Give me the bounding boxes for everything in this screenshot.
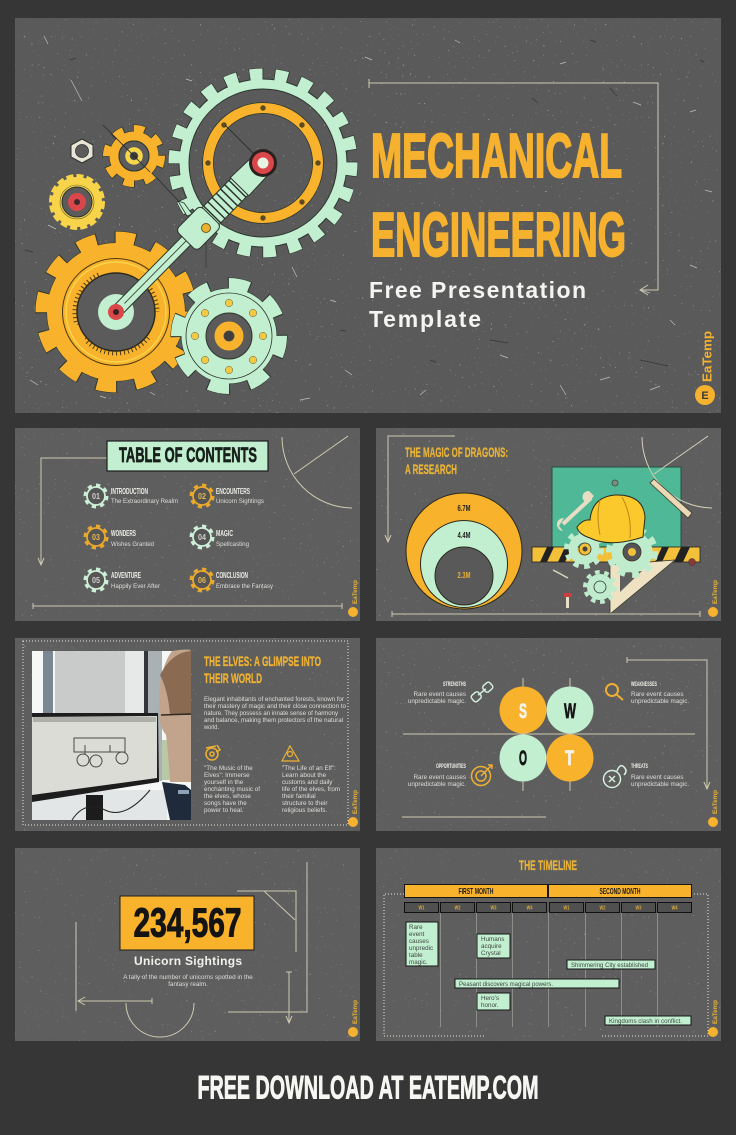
text: threats: THREATS xyxy=(631,764,648,770)
text: music of the elves: enchanting music of xyxy=(204,786,260,793)
panel: elves slide background xyxy=(15,638,360,831)
event: hero's honor: honor. xyxy=(481,1002,499,1009)
item: 04 magic xyxy=(191,526,249,548)
illustration: hero gears xyxy=(42,75,351,388)
icon: piston arm xyxy=(98,125,277,330)
text: elves description xyxy=(203,696,346,731)
item: 03 wonders xyxy=(85,526,154,548)
text: elves description: and balance, making them protectors of the natural xyxy=(204,717,343,724)
text: unicorn sightings: fantasy realm. xyxy=(168,981,208,988)
panel: timeline slide background xyxy=(376,848,721,1041)
event: rare event: table xyxy=(409,952,423,959)
item: 03 wonders: Wishes Granted xyxy=(111,541,154,548)
item: 02 encounters: 02 xyxy=(198,492,206,501)
logo: timeline brand: EaTemp xyxy=(712,1000,719,1024)
icon: magnifier xyxy=(606,684,623,700)
logo: elves brand: EaTemp xyxy=(352,790,359,814)
chart header: weeks: W4 xyxy=(526,906,533,912)
item: 01 introduction: 01 xyxy=(92,492,100,501)
text: strengths: Rare event causes xyxy=(413,691,466,698)
panel: SWOT slide background xyxy=(376,638,721,831)
item: 01 introduction: The Extraordinary Realm xyxy=(111,498,178,505)
logo: statistic brand xyxy=(348,1000,359,1037)
icon: chain link xyxy=(470,681,494,703)
chart header: weeks: W1 xyxy=(418,906,425,912)
illustration: engineering tools xyxy=(532,436,712,614)
text: strengths: STRENGTHS xyxy=(443,682,466,688)
icon: small orange gear xyxy=(107,129,161,183)
text: life of an elf: Learn about the xyxy=(282,772,327,779)
text: life of an elf: religious beliefs. xyxy=(282,807,327,814)
event: kingdoms clash: Kingdoms clash in conflict. xyxy=(609,1018,682,1025)
item: 05 adventure xyxy=(85,569,160,591)
event: humans acquire crystal: Humans xyxy=(481,936,504,943)
arrow: research corner line xyxy=(385,436,455,542)
chart: SWOT circles: T xyxy=(565,746,574,770)
text: unicorn sightings: Unicorn Sightings xyxy=(134,954,242,968)
item: 04 magic: Spellcasting xyxy=(216,541,249,548)
event: hero's honor: Hero's xyxy=(481,995,499,1002)
chart: nested circles: 2.3M xyxy=(458,571,471,580)
event: hero's honor xyxy=(477,993,510,1010)
chart header: weeks: W2 xyxy=(454,906,461,912)
chart header: months xyxy=(404,884,692,898)
logo: hero brand xyxy=(695,331,715,405)
text: opportunities xyxy=(408,764,466,788)
icon: large orange gear xyxy=(42,238,190,386)
chart: nested circles: 4.4M xyxy=(458,531,471,540)
icon: hex nut xyxy=(71,139,93,163)
text: unicorn sightings: A tally of the number of unicorns spotted in the xyxy=(123,974,253,981)
chart: SWOT circles: O xyxy=(519,746,527,770)
logo: elves brand xyxy=(348,790,359,827)
icon: target xyxy=(472,765,492,786)
text: threats: Rare event causes xyxy=(631,774,684,781)
text: unicorn sightings xyxy=(123,954,253,988)
item: 05 adventure: Happily Ever After xyxy=(111,583,160,590)
item: 06 conclusion: CONCLUSION xyxy=(216,571,248,580)
chart: SWOT circles: W xyxy=(564,699,576,723)
text: weaknesses xyxy=(631,682,689,705)
logo: contents brand: EaTemp xyxy=(352,580,359,604)
decoration: dotted frame xyxy=(23,641,348,825)
item: 01 introduction xyxy=(85,485,178,507)
panel: statistic content xyxy=(76,862,359,1037)
item: 05 adventure: ADVENTURE xyxy=(111,571,141,580)
heading: the magic of dragons: A RESEARCH xyxy=(405,461,457,477)
panel: dragons research slide background xyxy=(376,428,721,621)
logo: research brand xyxy=(708,580,719,617)
item: 02 encounters: Unicorn Sightings xyxy=(216,498,264,505)
logo: hero brand: E xyxy=(701,390,709,402)
chart header: weeks: W3 xyxy=(490,906,497,912)
text: life of an elf: customs and daily xyxy=(282,779,333,786)
item: 03 wonders: WONDERS xyxy=(111,529,136,538)
event: rare event xyxy=(406,922,438,966)
heading: the magic of dragons: THE MAGIC OF DRAGONS: xyxy=(405,444,508,460)
text: music of the elves: yourself in the xyxy=(204,779,244,786)
text: music of the elves: power to heal. xyxy=(204,807,244,814)
subtitle: hero subheading: Template xyxy=(369,306,481,332)
event: peasant discovers powers: Peasant discovers magical powers. xyxy=(459,981,553,988)
panel: timeline content xyxy=(384,857,719,1037)
item: 05 adventure: 05 xyxy=(92,576,100,585)
heading: the elves: THEIR WORLD xyxy=(204,670,262,686)
logo: timeline brand xyxy=(708,1000,719,1037)
chart: nested circles xyxy=(406,493,522,609)
item: 06 conclusion: Embrace the Fantasy xyxy=(216,583,274,590)
text: music of the elves: songs have the xyxy=(204,800,247,807)
panel: SWOT content xyxy=(402,657,719,827)
logo: statistic brand: EaTemp xyxy=(352,1000,359,1024)
text: weaknesses: WEAKNESSES xyxy=(631,682,657,688)
event: shimmering city: Shimmering City established xyxy=(571,962,648,969)
callout: big number: 234,567 xyxy=(134,900,242,946)
decoration: contents blueprint lines xyxy=(33,436,352,609)
text: music of the elves: the elves, whose xyxy=(204,793,251,800)
subtitle: hero subheading: Free Presentation xyxy=(369,277,586,303)
event: rare event: causes xyxy=(409,938,429,945)
item: 02 encounters: ENCOUNTERS xyxy=(216,487,250,496)
item: 02 encounters xyxy=(191,485,264,507)
text: opportunities: Rare event causes xyxy=(413,774,466,781)
panel: dragons research content xyxy=(385,436,719,617)
text: opportunities: OPPORTUNITIES xyxy=(436,764,466,770)
item: 06 conclusion xyxy=(191,569,274,591)
logo: SWOT brand: EaTemp xyxy=(712,790,719,814)
text: strengths xyxy=(408,682,466,705)
text: music of the elves: Elves": Immerse xyxy=(204,772,250,779)
arrow: hero blueprint line xyxy=(369,79,658,295)
title: hero heading xyxy=(371,121,626,270)
heading: the magic of dragons xyxy=(405,444,508,477)
chart header: weeks: W4 xyxy=(672,906,678,912)
logo: SWOT brand xyxy=(708,790,719,827)
chart: SWOT circles xyxy=(500,686,594,782)
icon: small yellow gear xyxy=(52,176,102,228)
heading: the elves: THE ELVES: A GLIMPSE INTO xyxy=(204,653,321,669)
text: life of an elf: life of the elves, from xyxy=(282,786,340,793)
decoration: statistic blueprint lines xyxy=(76,862,307,1037)
item: 01 introduction: INTRODUCTION xyxy=(111,487,148,496)
event: rare event: magic. xyxy=(409,959,428,966)
text: elves description: world. xyxy=(203,724,219,731)
chart header: weeks: W1 xyxy=(564,906,570,912)
icon: large mint gear xyxy=(175,75,351,251)
heading: the timeline: THE TIMELINE xyxy=(519,857,577,873)
logo: research brand: EaTemp xyxy=(712,580,719,604)
item: 04 magic: 04 xyxy=(198,533,206,542)
event: humans acquire crystal xyxy=(477,934,510,958)
text: threats xyxy=(631,764,689,788)
item: 06 conclusion: 06 xyxy=(198,576,206,585)
decoration: SWOT lines xyxy=(402,678,695,817)
icon: music gear xyxy=(206,745,220,760)
panel: hero slide background xyxy=(15,18,721,413)
text: weaknesses: Rare event causes xyxy=(631,691,684,698)
chart: SWOT circles: S xyxy=(519,699,527,723)
event: rare event: event xyxy=(409,931,425,938)
arrow: contents corner line xyxy=(38,458,107,565)
item: 04 magic: MAGIC xyxy=(216,529,233,538)
chart header: weeks: W3 xyxy=(636,906,642,912)
icon: elf figure xyxy=(282,746,299,761)
subtitle: hero subheading xyxy=(369,277,586,332)
photo: engineer at CAD monitor xyxy=(32,650,191,820)
text: music of the elves xyxy=(204,765,260,814)
text: life of an elf: "The Life of an Elf": xyxy=(282,765,336,772)
event: rare event: unpredic xyxy=(409,945,433,952)
event: humans acquire crystal: Crystal xyxy=(481,950,501,957)
chart header: weeks: W2 xyxy=(600,906,606,912)
heading: table of contents: TABLE OF CONTENTS xyxy=(119,443,257,467)
text: life of an elf: their familial xyxy=(282,793,316,800)
text: life of an elf: structure to their xyxy=(282,800,328,807)
text: elves description: nature. They possess an innate sense of harmony xyxy=(204,710,339,717)
chart header: months: SECOND MONTH xyxy=(600,886,640,896)
chart: nested circles: 6.7M xyxy=(458,504,471,513)
event: humans acquire crystal: acquire xyxy=(481,943,502,950)
event: rare event: Rare xyxy=(409,924,423,931)
panel: table of contents content xyxy=(33,436,359,617)
item: 03 wonders: 03 xyxy=(92,533,100,542)
panel: table of contents slide background xyxy=(15,428,360,621)
chart header: weeks xyxy=(404,902,692,912)
icon: bomb xyxy=(604,766,626,788)
callout: big number xyxy=(120,896,254,950)
text: opportunities: unpredictable magic. xyxy=(408,781,466,788)
chart header: months: FIRST MONTH xyxy=(458,886,494,896)
logo: contents brand xyxy=(348,580,359,617)
text: life of an elf xyxy=(282,765,340,814)
heading: the elves xyxy=(204,653,321,686)
heading: table of contents xyxy=(107,441,268,471)
text: strengths: unpredictable magic. xyxy=(408,698,466,705)
decoration: week grid lines xyxy=(440,912,658,1027)
text: elves description: their mastery of magic and their close connection to xyxy=(204,703,346,710)
text: threats: unpredictable magic. xyxy=(631,781,689,788)
decoration: timeline dotted frame xyxy=(384,894,708,1036)
text: weaknesses: unpredictable magic. xyxy=(631,698,689,705)
text: elves description: Elegant inhabitants of enchanted forests, known for xyxy=(204,696,344,703)
panel: statistic slide background xyxy=(15,848,360,1041)
icon: mint gear with bolts xyxy=(177,284,281,388)
event: peasant discovers powers xyxy=(455,979,619,988)
panel: elves content xyxy=(23,641,359,827)
arrow: SWOT corner line xyxy=(627,657,710,789)
text: music of the elves: "The Music of the xyxy=(204,765,253,772)
event: kingdoms clash xyxy=(605,1016,691,1025)
decoration: research base line xyxy=(392,611,700,617)
logo: hero brand: EaTemp xyxy=(700,331,714,382)
